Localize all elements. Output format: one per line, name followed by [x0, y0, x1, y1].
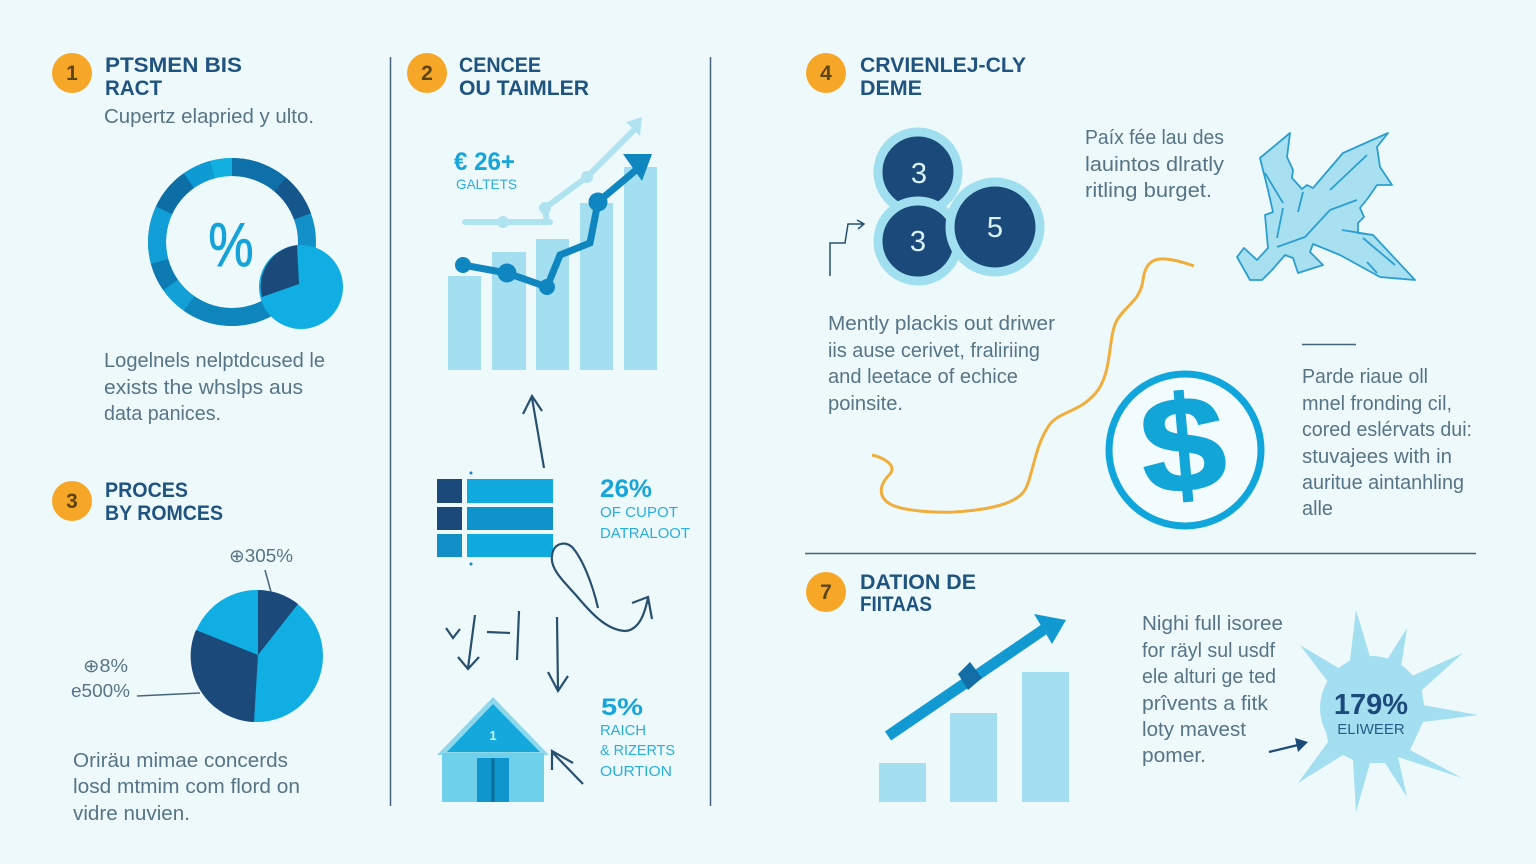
- badge 1: [52, 53, 92, 93]
- stat 26+: € 26+: [454, 148, 515, 176]
- heading 1: PTSMEN BIS: [105, 54, 242, 77]
- badge 3: [52, 481, 92, 521]
- body text 4: and leetace of echice: [828, 366, 1018, 388]
- text beside circles: lauintos dlratly: [1085, 154, 1224, 176]
- panel: section 1: [52, 53, 343, 425]
- starburst stat: 179%: [1334, 689, 1408, 721]
- heading 4: CRVIENLEJ-CLY: [860, 54, 1026, 77]
- pie label 305%: ⊕305%: [229, 546, 293, 566]
- badge 4: [806, 53, 846, 93]
- body text 4: poinsite.: [828, 393, 903, 415]
- body text 1: exists the whslps aus: [104, 377, 303, 399]
- subheading 1: Cupertz elapried y ulto.: [104, 106, 314, 128]
- number circles: 3: [911, 158, 927, 190]
- pie label 500%: e500%: [71, 681, 130, 701]
- stat 5%: [600, 694, 675, 780]
- heading 4: DEME: [860, 77, 922, 100]
- body text 3: Oriräu mimae concerds: [73, 750, 288, 772]
- body text 7: prîvents a fitk: [1142, 693, 1269, 715]
- house icon: 1: [489, 728, 497, 743]
- stat 5%: 5%: [601, 694, 643, 721]
- heading 1: RACT: [105, 77, 162, 100]
- number circles: 3: [910, 226, 926, 258]
- starburst stat: [1298, 610, 1478, 812]
- body text right: auritue aintanhling: [1302, 472, 1464, 494]
- badge 4: 4: [820, 62, 832, 85]
- stat 26%: DATRALOOT: [600, 526, 690, 542]
- heading 3: BY ROMCES: [105, 502, 223, 525]
- bar chart with arrow: [879, 614, 1069, 802]
- heading 7: FIITAAS: [860, 593, 932, 616]
- icon: dollar circle: $: [1135, 366, 1231, 524]
- curved loop arrow: [552, 544, 652, 631]
- stat 26%: [600, 475, 690, 542]
- stat 26%: 26%: [600, 475, 652, 503]
- icon: dollar circle: [1109, 366, 1261, 526]
- panel: section 3: [52, 479, 323, 825]
- body text right: mnel fronding cil,: [1302, 393, 1452, 415]
- small down arrows: [446, 611, 568, 691]
- badge 1: 1: [66, 62, 78, 85]
- body text 1: data panices.: [104, 403, 221, 425]
- pie label 8%: ⊕8%: [83, 656, 128, 676]
- badge 2: [407, 53, 447, 93]
- arrow to starburst: [1269, 738, 1308, 752]
- body text 7: for räyl sul usdf: [1142, 640, 1275, 662]
- arrow to house: [552, 751, 583, 784]
- orange curve: [872, 259, 1194, 512]
- stat 5%: OURTION: [600, 764, 672, 780]
- donut chart with percent: %: [208, 211, 254, 280]
- stat 26+: GALTETS: [456, 176, 517, 192]
- heading 3: PROCES: [105, 479, 188, 502]
- body text right: cored eslérvats dui:: [1302, 419, 1472, 441]
- badge 2: 2: [421, 62, 433, 85]
- donut chart with percent: [126, 136, 343, 348]
- pie chart: [137, 570, 323, 722]
- badge 7: 7: [820, 581, 832, 604]
- text beside circles: ritling burget.: [1085, 180, 1212, 202]
- heading 2: OU TAIMLER: [459, 77, 589, 100]
- body text 3: vidre nuvien.: [73, 803, 190, 825]
- body text 3: losd mtmim com flord on: [73, 776, 300, 798]
- panel: section 4: [806, 53, 1472, 526]
- stat 26+: [454, 148, 517, 192]
- body text 7: loty mavest: [1142, 719, 1246, 741]
- number circles: [878, 132, 1040, 281]
- number circles: 5: [987, 212, 1003, 244]
- text beside circles: Paíx fée lau des: [1085, 127, 1224, 149]
- body text 7: ele alturi ge ted: [1142, 666, 1276, 688]
- bar and line chart: [448, 117, 657, 370]
- stat 5%: RAICH: [600, 723, 646, 739]
- body text 4: iis ause cerivet, fraliriing: [828, 340, 1040, 362]
- house icon: [437, 697, 549, 802]
- body text 7: pomer.: [1142, 745, 1206, 767]
- body text 7: Nighi full isoree: [1142, 613, 1283, 635]
- body text right: stuvajees with in: [1302, 446, 1452, 468]
- arrow up: [523, 396, 544, 468]
- heading 2: CENCEE: [459, 54, 541, 77]
- panel: section 2: [407, 53, 690, 802]
- starburst stat: ELIWEER: [1337, 721, 1405, 738]
- badge 3: 3: [66, 490, 78, 513]
- stat 26%: OF CUPOT: [600, 505, 678, 521]
- panel: section 7: [806, 571, 1478, 812]
- body text right: Parde riaue oll: [1302, 366, 1428, 388]
- icon: dragon: [1237, 133, 1415, 280]
- heading 7: DATION DE: [860, 571, 976, 594]
- badge 7: [806, 572, 846, 612]
- bracket arrow: [830, 220, 864, 276]
- body text 4: Mently plackis out driwer: [828, 313, 1055, 335]
- stat 5%: & RIZERTS: [600, 743, 675, 759]
- table icon: [437, 472, 553, 566]
- body text 1: Logelnels nelptdcused le: [104, 350, 325, 372]
- body text right: alle: [1302, 498, 1333, 520]
